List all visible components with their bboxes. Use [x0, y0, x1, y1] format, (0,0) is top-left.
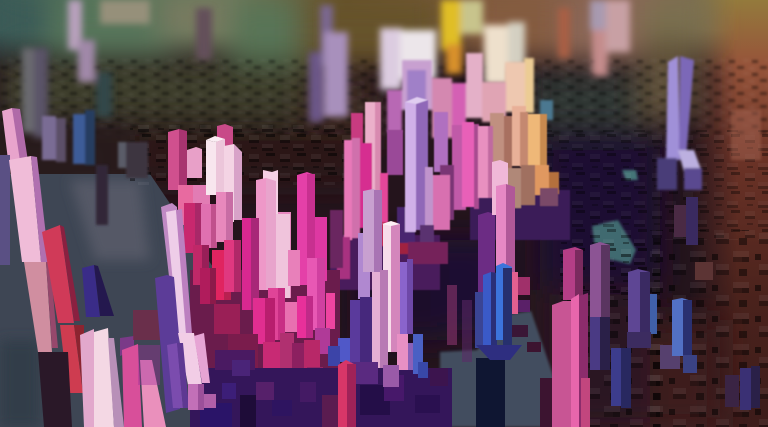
- bars: orange and tan stepped cluster: [470, 106, 570, 240]
- bars: main left pink cluster: [168, 124, 340, 391]
- floor: far blurred cubes: [0, 58, 768, 138]
- floor: reflective grey-blue surface: [0, 170, 638, 427]
- floor: dark purple cube base: [190, 350, 452, 427]
- bars: right-side pink and purple columns: [540, 197, 760, 427]
- floor: mid and near cubes: [0, 125, 768, 427]
- bars: centre-right pink and blue columns: [447, 160, 541, 427]
- bars: front-left pale and magenta columns: [80, 328, 166, 427]
- bars: front crimson column: [322, 360, 356, 427]
- bars: mid-distance towers: [42, 53, 761, 225]
- bars: far-left pink columns: [0, 108, 114, 427]
- bars: distant out-of-focus towers: [22, 0, 630, 138]
- bars: tall lavender column group: [133, 203, 216, 413]
- bars: centre pale pink towers: [328, 189, 428, 387]
- bars: back centre pink and purple cluster: [330, 97, 493, 290]
